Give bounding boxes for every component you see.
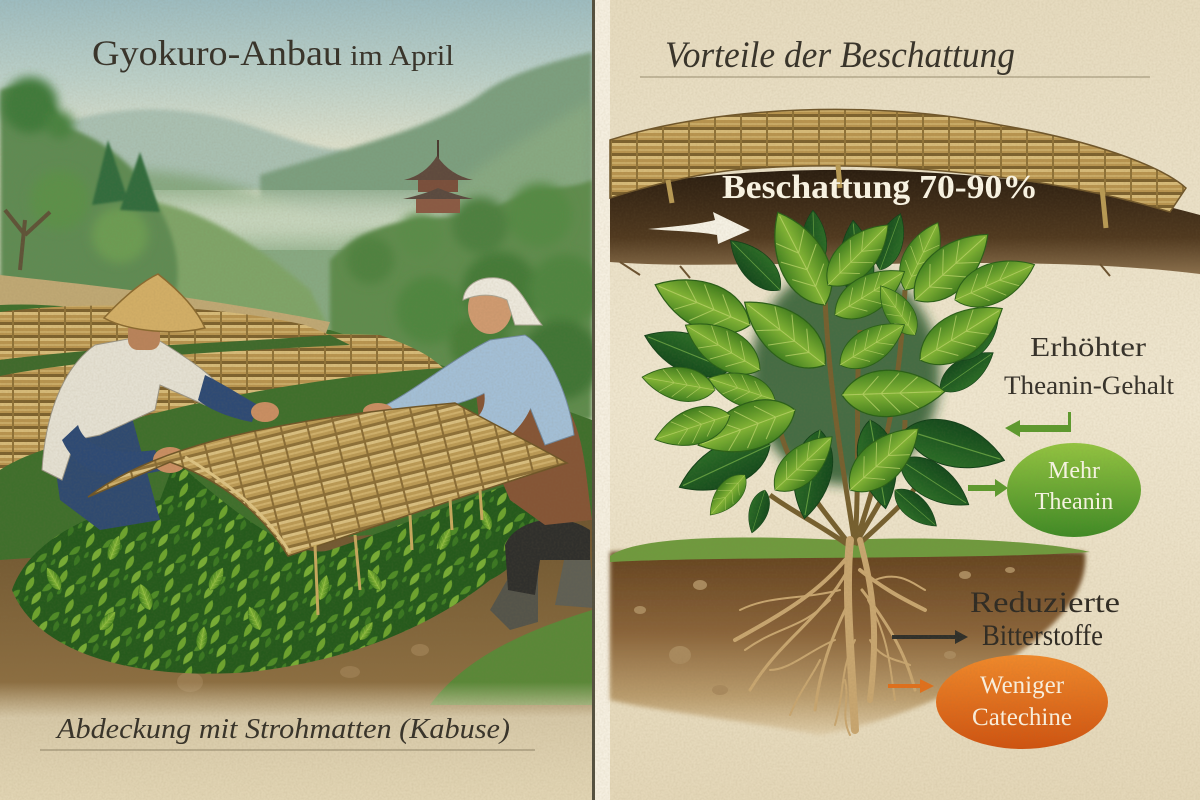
panel divider [592,0,610,800]
pill: Weniger Catechine [936,655,1108,749]
roots [735,540,925,735]
pill: Weniger Catechine: Catechine [972,704,1072,731]
label: Beschattung 70-90%: Beschattung 70-90% [722,169,1038,206]
plant stems [770,290,925,545]
arrow: to Catechine pill [888,679,934,693]
label: Erhöhter Theanin-Gehalt: Erhöhter [1030,332,1146,362]
caption: Abdeckung mit Strohmatten: Abdeckung mit Strohmatten (Kabuse) [55,714,510,745]
tea plant [637,202,1042,545]
tea bush [12,460,536,674]
front leaves [639,202,1042,523]
pill: Mehr Theanin: Theanin [1035,489,1113,515]
worker: left with conical hat [42,274,279,530]
sky and misty background [0,0,592,420]
caption rule [40,750,535,751]
arrow: to Bitterstoffe label [892,630,968,644]
shaded zone under mat [610,170,1200,274]
label: Erhöhter Theanin-Gehalt [1004,332,1175,400]
tree clusters [2,77,601,400]
arrow: to Theanin label [1005,412,1071,437]
panel title: Vorteile der Beschattung: Vorteile der Beschattung [665,35,1015,76]
caption band [0,682,592,800]
straw shade mat [610,109,1186,278]
back leaves [637,209,1011,536]
arrow: to Mehr Theanin pill [968,479,1008,497]
grass line [610,537,1090,562]
worker: right with headscarf [363,278,594,630]
label: Reduzierte Bitterstoffe [970,586,1120,652]
ground [0,520,592,800]
right side foliage [430,610,592,705]
panel title: Gyokuro-Anbau im April [94,40,454,72]
panel title: Gyokuro-Anbau im April: im April [350,40,454,72]
label: Reduzierte Bitterstoffe: Reduzierte [970,586,1120,619]
panel: Gyokuro cultivation scene [0,0,601,800]
panel title: Gyokuro-Anbau im April: Gyokuro-Anbau [92,33,342,73]
soil cross-section [610,548,1085,735]
pill: Mehr Theanin [1007,443,1141,537]
mid-ground foliage fill [0,304,592,560]
pill: Weniger Catechine: Weniger [980,672,1065,699]
icon: pagoda [403,140,473,213]
straw mat (kabuse) [88,403,567,615]
label: Reduzierte Bitterstoffe: Bitterstoffe [982,619,1103,652]
pill: Mehr Theanin: Mehr [1048,458,1100,484]
panel: benefits of shading [610,0,1200,800]
arrow: sunlight blocked [648,212,750,244]
label: Erhöhter Theanin-Gehalt: Theanin-Gehalt [1004,371,1175,400]
foliage shadow mass [750,265,940,485]
soil stones [634,567,1015,695]
soil clods [177,644,429,692]
straw covered terraces [0,275,443,470]
